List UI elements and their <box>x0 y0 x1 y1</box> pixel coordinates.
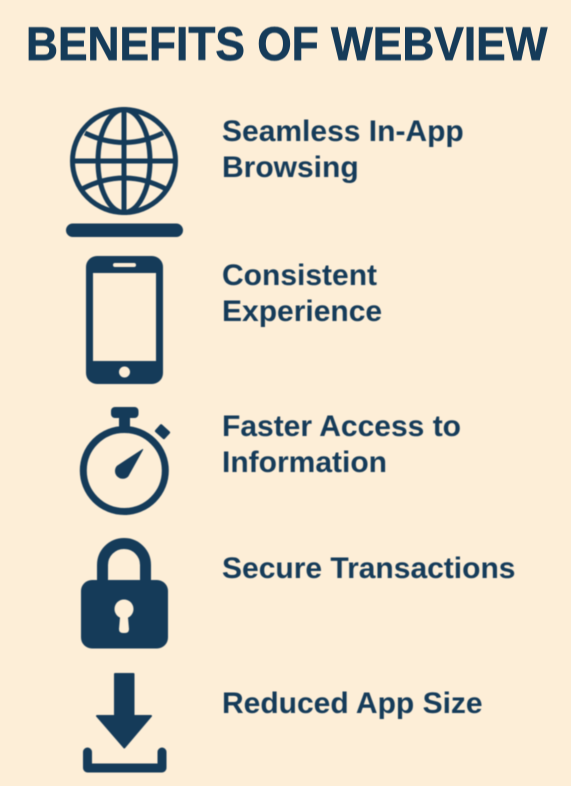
text: reduced app size: Reduced App Size <box>222 687 483 720</box>
icon: globe <box>68 110 181 235</box>
text: faster access: Information <box>222 446 387 479</box>
icon: phone <box>86 256 163 384</box>
title: BENEFITS OF WEBVIEW <box>26 17 547 70</box>
text: secure transactions: Secure Transactions <box>222 552 515 585</box>
text: faster access <box>222 410 461 479</box>
text: seamless in-app browsing: Seamless In-App <box>222 115 464 148</box>
text: consistent experience: Experience <box>222 295 382 328</box>
text: seamless in-app browsing: Browsing <box>222 151 359 184</box>
icon: stopwatch <box>83 407 171 512</box>
icon: download <box>88 674 162 768</box>
icon: padlock <box>81 544 168 648</box>
text: seamless in-app browsing <box>222 115 464 184</box>
text: consistent experience: Consistent <box>222 259 377 292</box>
text: faster access: Faster Access to <box>222 410 461 443</box>
text: consistent experience <box>222 259 382 328</box>
